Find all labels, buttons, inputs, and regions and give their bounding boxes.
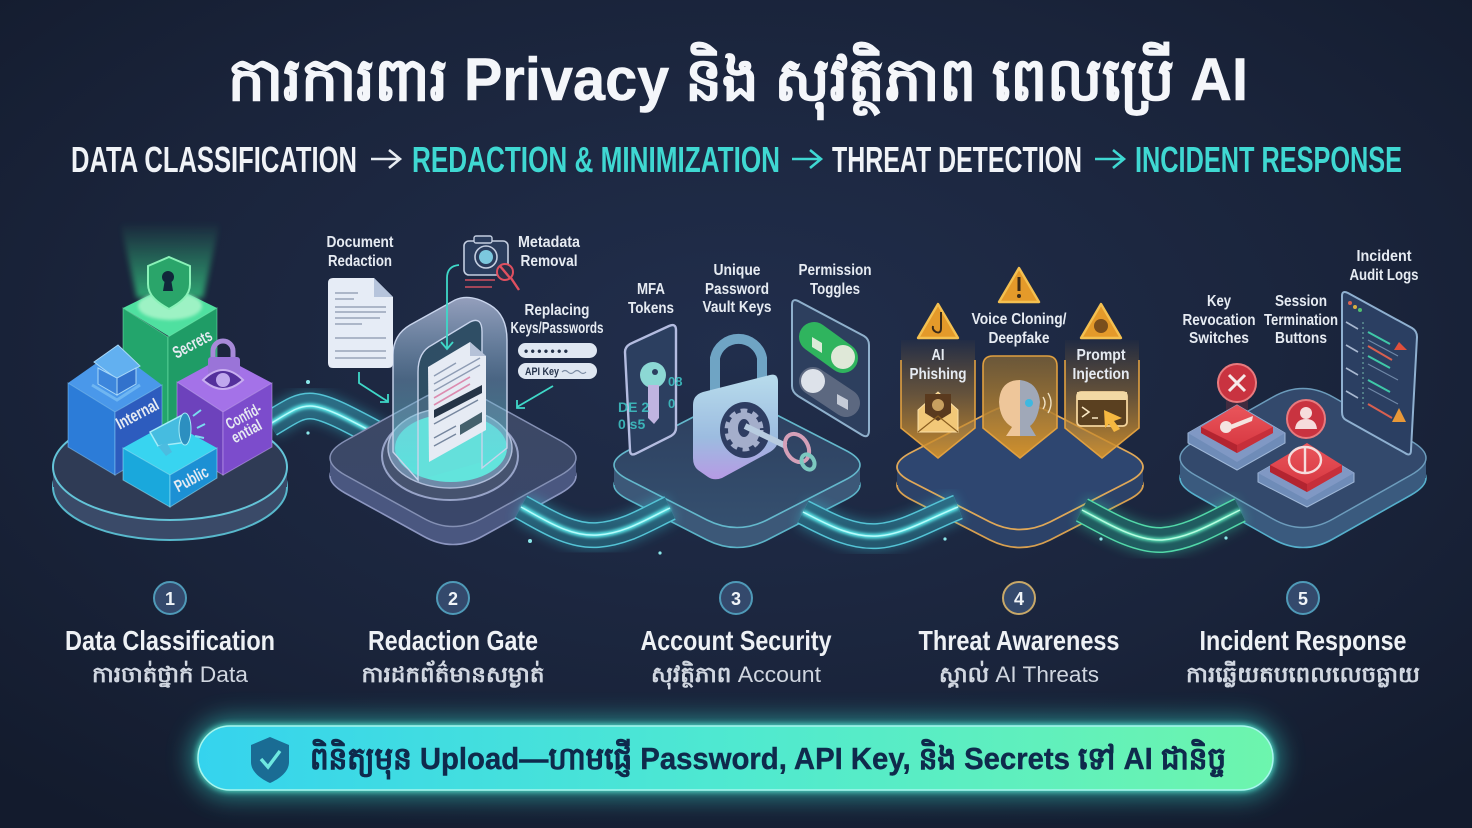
green light beam bbox=[120, 222, 220, 298]
panel: step 2 redaction gate bbox=[326, 234, 604, 544]
callout labels step 5: Key bbox=[1207, 293, 1231, 310]
step number badges: 5 bbox=[1298, 589, 1308, 609]
square platform bbox=[614, 402, 860, 548]
cube: confidential: ential bbox=[229, 417, 265, 447]
threat shield: ai phishing: AI bbox=[932, 347, 944, 364]
callout labels step 3: Password bbox=[705, 281, 769, 298]
callout labels step 5 bbox=[1182, 248, 1419, 347]
threat shield: ai phishing bbox=[901, 304, 975, 458]
banner text: ពិនិត្យមុន Upload—ហាមផ្ញើ Password, API Key, និង Secrets ទៅ AI ជានិច្ច bbox=[310, 738, 1226, 780]
cube: secrets bbox=[123, 285, 217, 455]
step titles and subtitles: ការដកព័ត៌មានសម្ងាត់ bbox=[362, 660, 545, 688]
icon: mfa phone: DE 2 bbox=[618, 399, 649, 415]
step number badges: 1 bbox=[165, 589, 175, 609]
step titles and subtitles: Account Security bbox=[640, 625, 832, 656]
cube: public bbox=[123, 422, 217, 507]
subtitle: workflow stages: REDACTION & MINIMIZATION bbox=[412, 139, 780, 180]
step titles and subtitles: Data Classification bbox=[65, 625, 275, 656]
square platform bbox=[1180, 388, 1426, 548]
step titles and subtitles: ការចាត់ថ្នាក់ Data bbox=[92, 660, 249, 688]
icon: green keyhole shield bbox=[148, 257, 190, 309]
callout labels step 5: Incident bbox=[1356, 248, 1412, 265]
callout labels step 5: Switches bbox=[1189, 330, 1249, 347]
callout labels step 2: Replacing bbox=[524, 302, 590, 319]
callout labels step 5: Buttons bbox=[1275, 330, 1327, 347]
step titles and subtitles: សុវត្ថិភាព Account bbox=[651, 660, 821, 690]
title: ការការពារ Privacy និង សុវត្ថិភាព ពេលប្រើ AI bbox=[228, 41, 1248, 120]
cube: confidential: Confid- bbox=[223, 401, 265, 433]
icon: padlock with gear and key bbox=[693, 339, 817, 479]
callout labels step 2: Redaction bbox=[328, 253, 392, 270]
step number badges bbox=[154, 582, 1319, 614]
step titles and subtitles: ការឆ្លើយតបពេលលេចធ្លាយ bbox=[1186, 660, 1420, 688]
callout labels step 2: Metadata bbox=[518, 234, 580, 251]
icon: megaphone bbox=[150, 410, 205, 456]
callout labels step 2 bbox=[326, 234, 604, 337]
connector pipes between steps 2 to 5 bbox=[306, 380, 1240, 555]
cube: internal bbox=[68, 350, 162, 475]
threat shield: prompt injection: Prompt bbox=[1076, 347, 1126, 364]
callout labels step 5: Termination bbox=[1264, 312, 1338, 329]
cube: secrets: Secrets bbox=[169, 326, 215, 362]
callout labels step 3: MFA bbox=[637, 281, 665, 298]
threat shield: voice cloning bbox=[972, 268, 1067, 458]
callout labels step 3: Vault Keys bbox=[702, 299, 772, 316]
icon: mfa phone: 0 bbox=[668, 396, 675, 411]
step titles and subtitles bbox=[65, 625, 1420, 690]
step titles and subtitles: Incident Response bbox=[1200, 625, 1406, 656]
cube: internal: Internal bbox=[113, 395, 162, 433]
round platform bbox=[53, 414, 287, 540]
step number badges: 3 bbox=[731, 589, 741, 609]
panel: step 4 threat awareness bbox=[897, 268, 1143, 548]
square platform gold bbox=[897, 404, 1143, 548]
permission toggles panel bbox=[792, 300, 869, 436]
step titles and subtitles: Redaction Gate bbox=[368, 625, 538, 656]
icon: check shield bbox=[251, 737, 289, 783]
callout labels step 3: Tokens bbox=[628, 300, 674, 317]
callout labels step 5: Session bbox=[1275, 293, 1327, 310]
callout labels step 5: Revocation bbox=[1182, 312, 1256, 329]
icon: mfa phone bbox=[618, 325, 682, 454]
threat shield: voice cloning: Voice Cloning/ bbox=[972, 311, 1067, 328]
panel: step 3 account security bbox=[614, 262, 872, 548]
callout labels step 2: Removal bbox=[520, 253, 578, 270]
threat shield: voice cloning: Deepfake bbox=[988, 330, 1050, 347]
threat shield: prompt injection bbox=[1065, 304, 1139, 458]
panel: step 5 incident response bbox=[1180, 248, 1426, 548]
redacted paper inside gate bbox=[428, 342, 486, 462]
audit log panel bbox=[1342, 292, 1417, 454]
connector pipe 1 to 2 bbox=[270, 406, 380, 436]
callout labels step 3 bbox=[628, 262, 872, 317]
threat shield: ai phishing: Phishing bbox=[910, 366, 966, 383]
document icon bbox=[328, 278, 393, 368]
bottom warning banner bbox=[190, 718, 1281, 798]
step number badges: 4 bbox=[1014, 589, 1024, 609]
icon: lock and eye bbox=[203, 341, 243, 389]
icon: camera metadata bbox=[464, 236, 519, 290]
subtitle: workflow stages bbox=[71, 139, 1402, 180]
callout labels step 2: Keys/Passwords bbox=[510, 320, 604, 337]
red key revocation button bbox=[1188, 364, 1285, 470]
callout labels step 2: Document bbox=[326, 234, 394, 251]
glass arch bbox=[393, 297, 507, 480]
subtitle: workflow stages: THREAT DETECTION bbox=[832, 139, 1082, 180]
glowing gate base bbox=[382, 412, 518, 500]
subtitle: workflow stages: DATA CLASSIFICATION bbox=[71, 139, 357, 180]
cube: confidential bbox=[177, 357, 272, 475]
callout labels step 5: Audit Logs bbox=[1350, 267, 1419, 284]
step titles and subtitles: Threat Awareness bbox=[918, 625, 1120, 656]
password pills bbox=[518, 343, 597, 379]
icon: mfa phone: 0 s5 bbox=[618, 416, 645, 432]
callout labels step 3: Permission bbox=[798, 262, 872, 279]
arrows into gate bbox=[359, 265, 553, 408]
cube: public: Public bbox=[171, 462, 212, 496]
password pills: API Key bbox=[525, 366, 560, 378]
red session termination button bbox=[1258, 400, 1354, 507]
password pills: ••••••• bbox=[524, 344, 568, 358]
square platform bbox=[330, 390, 576, 544]
panel: step 1 data classification bbox=[53, 222, 287, 540]
icon: bank building bbox=[92, 345, 140, 400]
step number badges: 2 bbox=[448, 589, 458, 609]
icon: mfa phone: 08 bbox=[668, 374, 682, 389]
callout labels step 3: Toggles bbox=[810, 281, 860, 298]
threat shield: prompt injection: Injection bbox=[1072, 366, 1130, 383]
step titles and subtitles: ស្គាល់ AI Threats bbox=[939, 660, 1099, 688]
callout labels step 3: Unique bbox=[714, 262, 761, 279]
